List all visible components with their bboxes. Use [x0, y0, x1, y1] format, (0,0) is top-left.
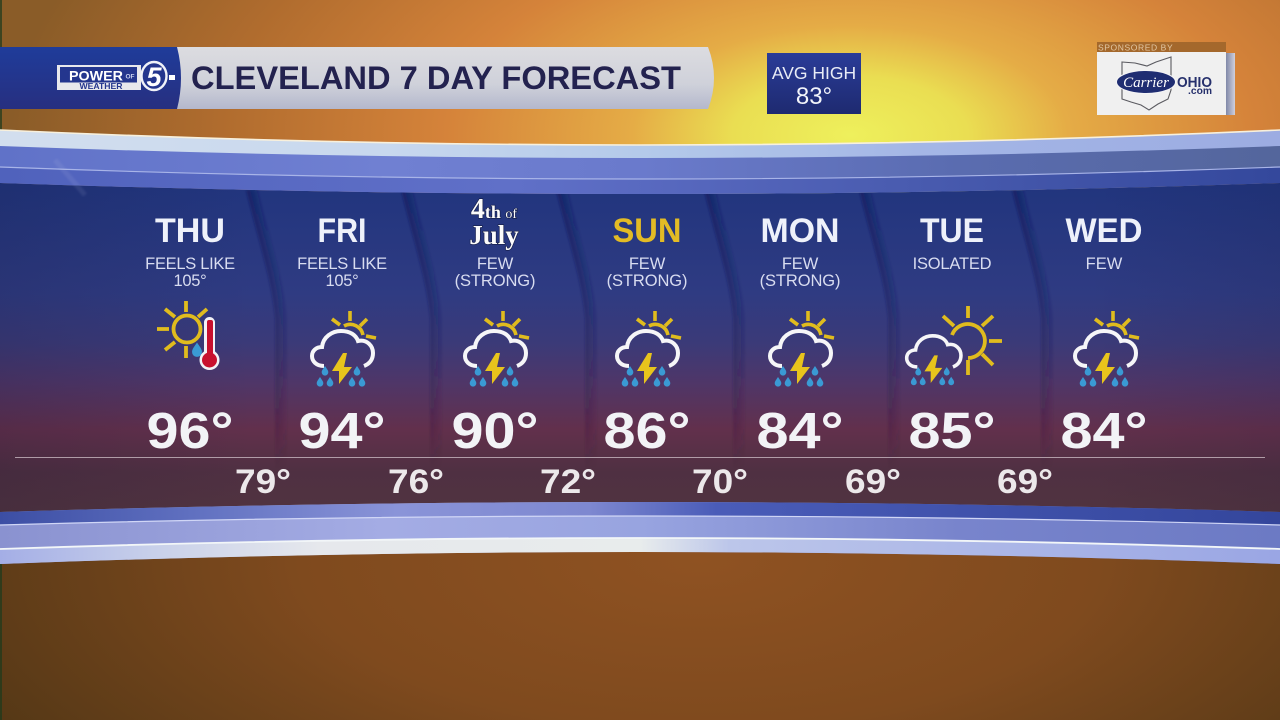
sponsor card: OHIO: [1177, 75, 1212, 91]
logo: Power of 5 Weather: 5: [146, 62, 162, 92]
average high box: 83°: [796, 83, 832, 110]
logo: Power of 5 Weather: OF: [126, 74, 135, 80]
day label: FRI: [318, 212, 366, 250]
condition text: FEW: [782, 255, 819, 273]
icon: storm with large sun: [907, 306, 1002, 385]
column: Friday: [297, 212, 387, 459]
icon: storm with partial sun: [770, 311, 834, 387]
average high box: [767, 53, 861, 114]
title bar: [0, 47, 714, 109]
day label: TUE: [920, 212, 984, 250]
condition text: FEELS LIKE: [145, 255, 235, 273]
condition text: FEW: [1086, 255, 1123, 273]
low temperatures: 79°: [235, 463, 291, 501]
background: lower brown area: [0, 500, 1280, 720]
column: Wednesday: [1060, 212, 1148, 459]
condition text: (STRONG): [455, 272, 535, 290]
holiday label: 4th of: [471, 194, 517, 225]
panel: forecast background: [0, 183, 1280, 512]
icon: storm with partial sun: [617, 311, 681, 387]
sponsor block: [1097, 42, 1235, 115]
high temperature: 85°: [908, 402, 996, 459]
average high box: AVG HIGH: [772, 63, 856, 83]
high temperature: 94°: [298, 402, 386, 459]
bottom curved band: [0, 502, 1280, 564]
low temperatures: 69°: [997, 463, 1053, 501]
condition text: (STRONG): [760, 272, 840, 290]
icon: storm with partial sun: [312, 311, 376, 387]
divider line: [15, 457, 1265, 458]
column: 4th of July: [452, 194, 538, 459]
sponsor card: [1097, 52, 1235, 115]
title bar: blue logo tab: [0, 47, 182, 109]
column: Monday: [756, 212, 844, 459]
icon: storm with partial sun: [1075, 311, 1139, 387]
top curved band: [0, 130, 1280, 195]
logo: Power of 5 Weather: WEATHER: [80, 81, 122, 91]
low temperatures: 69°: [845, 463, 901, 501]
low temperatures: 72°: [540, 463, 596, 501]
logo: Power of 5 Weather: POWER: [69, 68, 123, 84]
column: Tuesday: [907, 212, 1002, 459]
logo: Power of 5 Weather: [57, 62, 175, 92]
high temperature: 84°: [1060, 402, 1148, 459]
condition text: (STRONG): [607, 272, 687, 290]
heading: CLEVELAND 7 DAY FORECAST: [191, 60, 681, 96]
day label: MON: [760, 212, 840, 250]
holiday label: July: [469, 220, 519, 250]
icon: sun with thermometer: [157, 301, 220, 370]
icon: storm with partial sun: [465, 311, 529, 387]
condition text: FEW: [477, 255, 514, 273]
column: Sunday: [604, 212, 690, 459]
condition text: ISOLATED: [913, 255, 992, 273]
condition text: 105°: [326, 272, 358, 290]
title bar: grey heading tab: [177, 47, 714, 109]
low temperatures: [235, 463, 1053, 501]
condition text: FEELS LIKE: [297, 255, 387, 273]
sponsor card: Carrier: [1123, 75, 1169, 91]
high temperature: 86°: [604, 402, 690, 459]
high temperature: 84°: [756, 402, 844, 459]
condition text: 105°: [174, 272, 206, 290]
high temperature: 90°: [452, 402, 538, 459]
day label: WED: [1066, 212, 1142, 250]
background: orange and yellow sky: [0, 0, 1280, 200]
sponsor card: .com: [1188, 86, 1212, 97]
low temperatures: 70°: [692, 463, 748, 501]
condition text: FEW: [629, 255, 666, 273]
day label: SUN: [612, 212, 682, 250]
low temperatures: 76°: [388, 463, 444, 501]
day label: THU: [155, 212, 225, 250]
high temperature: 96°: [146, 402, 234, 459]
sponsor label: SPONSORED BY: [1098, 42, 1173, 52]
column: Thursday: [145, 212, 235, 459]
